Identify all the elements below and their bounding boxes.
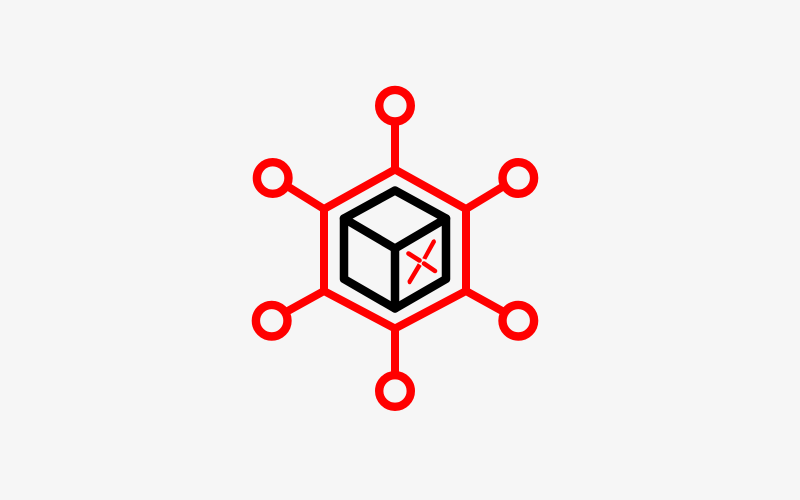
connector: top left: [287, 186, 324, 209]
connector: bottom left: [286, 291, 324, 312]
icon: network of nodes: [256, 90, 534, 407]
node: bottom: [379, 375, 411, 407]
cube front edge: [391, 248, 399, 308]
connector: bottom right: [466, 291, 504, 312]
connector: bottom: [391, 329, 399, 374]
fan blade: lower left, tapered: [408, 264, 421, 284]
fan blade: upper left: [408, 254, 420, 260]
icon: cube: [344, 190, 446, 308]
node: top: [379, 90, 411, 121]
node: bottom right: [502, 305, 534, 337]
node: top right: [502, 162, 534, 194]
fan blade: lower right: [424, 264, 435, 271]
hexagon outline: [324, 170, 466, 328]
cube outline: [344, 190, 446, 308]
icon: red fan: [408, 240, 436, 284]
cube inner edges: [344, 218, 446, 248]
node: top left: [257, 162, 289, 194]
fan blade: upper right, tapered: [423, 240, 436, 259]
node: bottom left: [256, 305, 288, 337]
connector: top right: [466, 186, 504, 209]
connector: top: [391, 122, 399, 169]
